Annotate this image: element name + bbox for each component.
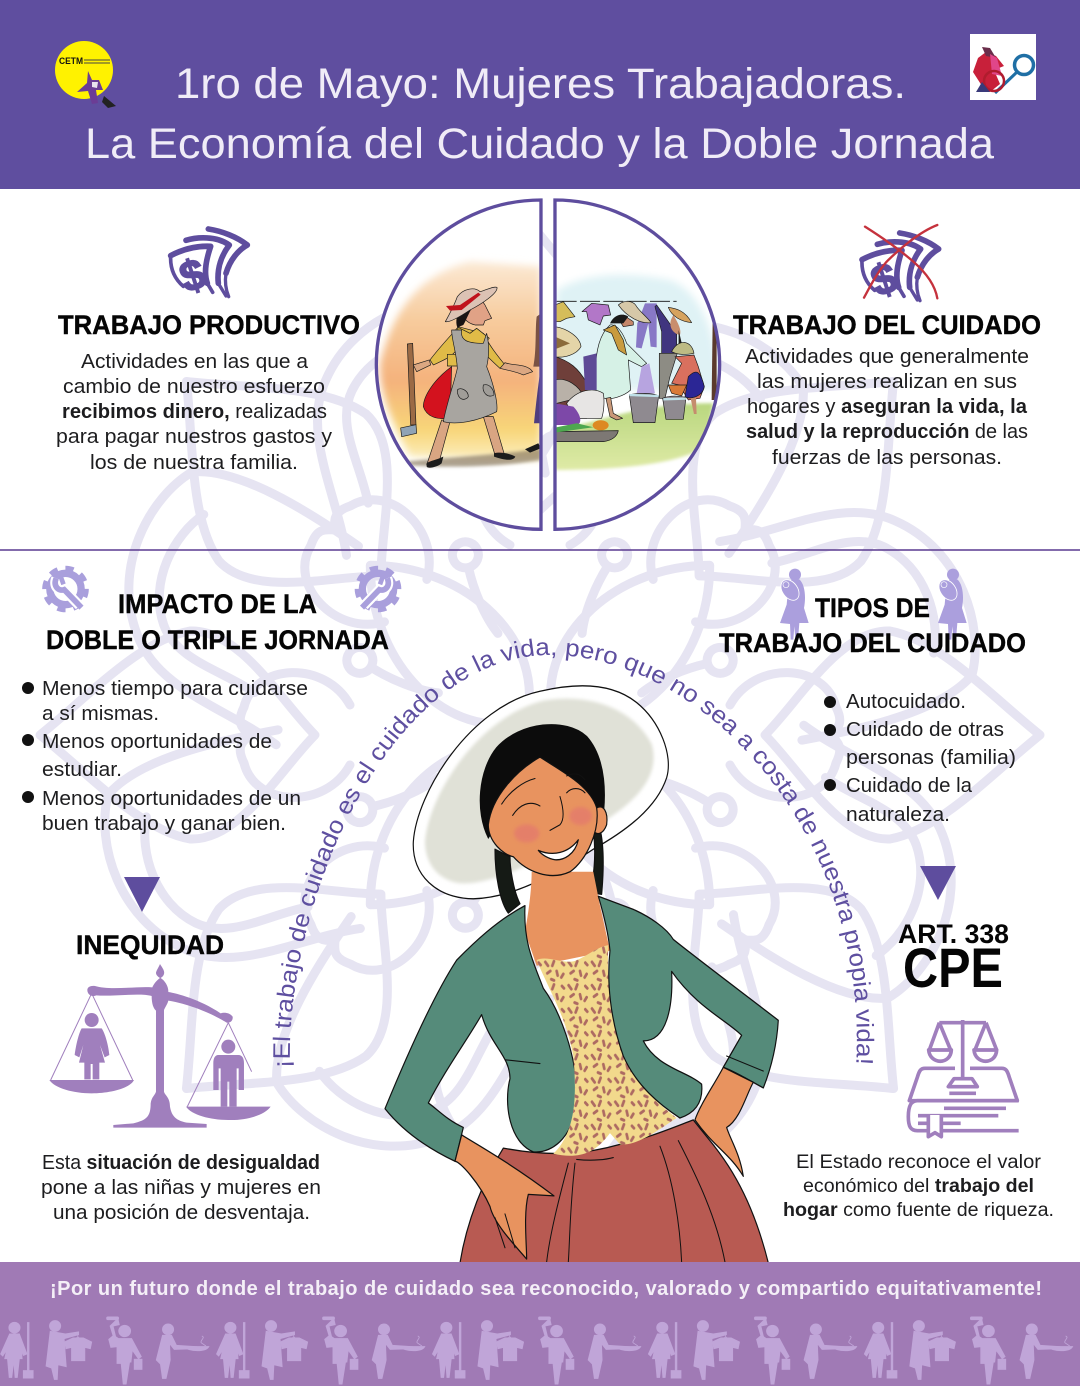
red underskirt	[423, 367, 452, 419]
arrow: down left	[124, 877, 160, 912]
footer slogan: ¡Por un futuro donde el trabajo de cuidado sea reconocido, valorado y compartido equitativamente!	[50, 1278, 1042, 1300]
text: definicion productivo: para pagar nuestros gastos y	[56, 425, 333, 448]
panel: tipos de trabajo del cuidado	[719, 569, 1054, 1221]
hand right	[695, 1067, 753, 1176]
text: definicion cuidado: Actividades que generalmente	[745, 345, 1029, 368]
panel: trabajo productivo	[56, 229, 360, 474]
hand left	[455, 1135, 554, 1259]
mandala background	[40, 235, 1040, 1235]
list: impactos: Menos oportunidades de	[42, 730, 272, 753]
icon: money crossed out	[862, 225, 939, 306]
next figure	[533, 314, 540, 367]
panel: impacto de la doble jornada	[22, 569, 398, 1224]
facial features	[502, 774, 585, 830]
heading: impacto	[46, 589, 389, 655]
jacket right	[598, 896, 778, 1118]
text: desigualdad: una posición de desventaja.	[53, 1201, 310, 1224]
text: estado reconoce	[783, 1152, 1054, 1221]
icon: gear left	[46, 569, 85, 609]
smile	[538, 840, 578, 860]
pattern: women working silhouettes	[1, 1317, 1072, 1384]
footer band	[0, 1262, 1080, 1386]
blush	[514, 824, 539, 842]
text: definicion cuidado: hogares y aseguran la vida, la	[747, 395, 1028, 418]
jacket left	[385, 906, 577, 1161]
list: impactos: a sí mismas.	[42, 702, 159, 725]
tool	[407, 343, 416, 425]
heading: trabajo del cuidado: TRABAJO DEL CUIDADO	[733, 310, 1041, 340]
hair back	[480, 725, 604, 838]
list: tipos: Cuidado de la	[846, 774, 973, 797]
list: tipos: Cuidado de otras	[846, 718, 1004, 741]
icon: mother with baby right	[935, 569, 967, 640]
hanging clothes	[555, 302, 575, 322]
text: definicion productivo: recibimos dinero, realizadas	[62, 400, 327, 423]
list: tipos: personas (familia)	[846, 746, 1016, 769]
divider line	[0, 549, 1080, 551]
hat	[445, 287, 497, 322]
heading: inequidad: INEQUIDAD	[76, 930, 224, 960]
text: estado reconoce: económico del trabajo del	[803, 1176, 1034, 1197]
blouse	[537, 945, 677, 1156]
title: La Economía del Cuidado y la Doble Jornada	[85, 120, 994, 168]
yellow blouse	[430, 327, 505, 368]
header band	[0, 0, 1080, 189]
head	[466, 302, 492, 326]
text: definicion cuidado	[745, 345, 1029, 469]
face	[488, 757, 597, 876]
heading: art 338 cpe: ART. 338	[898, 919, 1009, 949]
text: definicion cuidado: fuerzas de las personas.	[772, 446, 1002, 469]
logo: gender symbols	[970, 34, 1036, 100]
heading: impacto: DOBLE O TRIPLE JORNADA	[46, 625, 389, 655]
title: 1ro de Mayo: Mujeres Trabajadoras.	[175, 60, 906, 108]
list: impactos: Menos tiempo para cuidarse	[42, 677, 308, 700]
illustration: smiling woman in hat	[385, 686, 778, 1263]
text: definicion productivo: cambio de nuestro esfuerzo	[63, 375, 325, 398]
text: definicion cuidado: las mujeres realizan en sus	[757, 370, 1017, 393]
list: tipos: Autocuidado.	[846, 690, 966, 713]
text: definicion cuidado: salud y la reproducción de las	[746, 420, 1028, 443]
apron	[443, 330, 497, 423]
ear	[593, 807, 607, 834]
list: impactos: buen trabajo y ganar bien.	[42, 812, 286, 835]
text: desigualdad: pone a las niñas y mujeres en	[41, 1176, 321, 1199]
list: impactos: estudiar.	[42, 758, 122, 781]
heading: impacto: IMPACTO DE LA	[118, 589, 317, 619]
arms and hands	[413, 360, 533, 375]
icon: mother with baby left	[777, 569, 809, 640]
text: estado reconoce: hogar como fuente de riqueza.	[783, 1200, 1054, 1221]
standing woman	[595, 325, 647, 399]
braids	[495, 849, 520, 913]
illustration: woman with tool, left half circle	[376, 200, 541, 529]
list: tipos: naturaleza.	[846, 803, 950, 826]
heading: tipos	[719, 593, 1026, 658]
list: impactos: Menos oportunidades de un	[42, 787, 301, 810]
icon: money	[171, 229, 247, 302]
icon: money crossed out: $	[865, 253, 903, 306]
icon: unequal scale	[49, 964, 271, 1128]
buckets	[629, 393, 659, 423]
heading: tipos: TRABAJO DEL CUIDADO	[719, 628, 1026, 658]
title	[85, 60, 994, 168]
list: impactos	[22, 677, 308, 835]
skirt	[460, 1120, 768, 1263]
logo: CETM: CETM	[59, 56, 83, 66]
heading: tipos: TIPOS DE	[815, 593, 930, 623]
text: desigualdad: Esta situación de desigualdad	[42, 1151, 320, 1174]
icon: money: $	[174, 249, 212, 302]
woman hanging clothes	[655, 305, 677, 353]
seated woman	[556, 357, 590, 419]
purple cloth in bucket	[637, 363, 655, 393]
hat	[413, 686, 668, 899]
girl	[672, 355, 704, 400]
text: definicion productivo	[56, 350, 333, 474]
heading: art 338 cpe: CPE	[903, 936, 1003, 999]
icon: law book and scales	[908, 1020, 1019, 1137]
list: tipos	[824, 690, 1016, 826]
icon: gear right	[358, 569, 398, 609]
washing basin	[555, 431, 618, 442]
panel: trabajo del cuidado	[733, 225, 1041, 469]
curved slogan text: ¡El trabajo de cuidado es el cuidado de la vida, pero que no sea a costa de nuestra propia vida!	[272, 638, 874, 1066]
text: definicion productivo: los de nuestra familia.	[90, 451, 298, 474]
illustration: women washing clothes, right half circle	[555, 200, 720, 529]
arrow: down right	[920, 866, 956, 900]
text: desigualdad	[41, 1151, 321, 1224]
logo: CETM	[55, 41, 116, 108]
neck and chest	[525, 872, 610, 966]
text: estado reconoce: El Estado reconoce el valor	[796, 1152, 1042, 1173]
heading: trabajo productivo: TRABAJO PRODUCTIVO	[58, 310, 360, 340]
text: definicion productivo: Actividades en las que a	[81, 350, 309, 373]
legs	[427, 417, 505, 465]
